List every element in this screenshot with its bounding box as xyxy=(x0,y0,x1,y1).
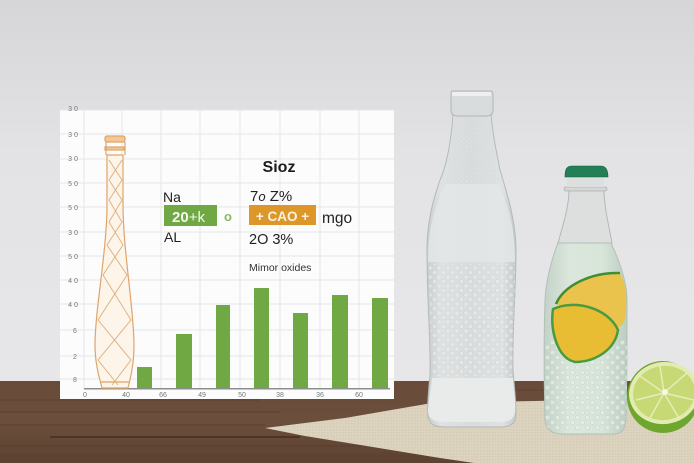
y axis labels: 4 0 xyxy=(68,278,78,285)
label: green o: o xyxy=(224,209,232,224)
y axis labels: 3 0 xyxy=(68,230,78,237)
embossed dots neck xyxy=(446,122,497,182)
x axis labels: 36 xyxy=(316,392,324,399)
photo: cut lime xyxy=(625,357,694,433)
x axis labels: 49 xyxy=(198,392,206,399)
embossed dots xyxy=(544,340,627,430)
x axis labels: 40 xyxy=(122,392,130,399)
y axis labels: 5 0 xyxy=(68,181,78,188)
bottle collar xyxy=(564,187,607,191)
label: AL: AL xyxy=(164,229,181,245)
badge: green xyxy=(164,205,217,226)
bottle body xyxy=(544,243,627,434)
x axis labels xyxy=(83,392,363,399)
x axis labels: 66 xyxy=(159,392,167,399)
label: mgo: mgo xyxy=(322,210,352,227)
y axis labels: 8 xyxy=(73,377,77,384)
y axis labels: 5 0 xyxy=(68,205,78,212)
x axis labels: 0 xyxy=(83,392,87,399)
badge: green: 20+k xyxy=(172,209,205,226)
lime slice front xyxy=(552,305,618,362)
y axis labels: 3 0 xyxy=(68,106,78,113)
chart background xyxy=(60,110,394,399)
bottle glass neck xyxy=(558,190,612,243)
label: minor oxides: Mimor oxides xyxy=(249,262,311,274)
x axis labels: 38 xyxy=(276,392,284,399)
y axis labels: 3 0 xyxy=(68,132,78,139)
label: Na: Na xyxy=(163,189,181,205)
badge: orange: + CAO + xyxy=(256,209,309,224)
bottle lip xyxy=(451,91,493,116)
y axis labels: 3 0 xyxy=(68,156,78,163)
y axis labels: 6 xyxy=(73,328,77,335)
value: 70 Z%: 7o Z% xyxy=(250,188,292,205)
bar chart xyxy=(137,288,388,389)
x axis labels: 50 xyxy=(238,392,246,399)
value: 20 3%: 2O 3% xyxy=(249,232,293,248)
x axis line xyxy=(84,388,390,390)
wooden table xyxy=(0,381,694,463)
y axis labels: 4 0 xyxy=(68,302,78,309)
green cap xyxy=(565,166,608,177)
lime slice back xyxy=(556,273,626,328)
y axis labels xyxy=(68,106,78,384)
bottle body xyxy=(427,113,516,427)
heading: SiO2: Sioz xyxy=(263,159,295,176)
photo: large clear bottle xyxy=(427,91,516,427)
linen cloth xyxy=(265,398,694,463)
bottom water xyxy=(428,378,515,422)
x axis labels: 60 xyxy=(355,392,363,399)
embossed dots lower xyxy=(429,264,515,376)
icon: bottle outline xyxy=(95,136,134,388)
y axis labels: 5 0 xyxy=(68,254,78,261)
badge: orange xyxy=(249,205,316,225)
photo: small bottle with lime xyxy=(544,166,627,434)
y axis labels: 2 xyxy=(73,354,77,361)
panel: composition chart xyxy=(60,106,394,399)
water highlight xyxy=(428,184,515,262)
